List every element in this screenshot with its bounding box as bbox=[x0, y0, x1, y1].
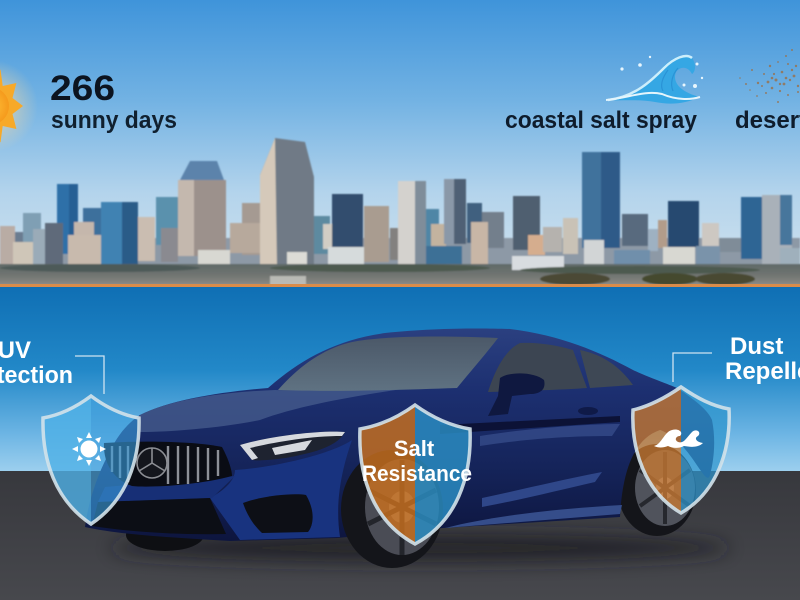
door handle bbox=[578, 407, 598, 415]
front wheel bbox=[341, 450, 443, 568]
label: coastal salt spray: coastal salt spray bbox=[505, 107, 698, 134]
label: Salt Resistance bbox=[362, 436, 472, 486]
rear wheel bbox=[618, 444, 696, 536]
car shadow bbox=[110, 534, 730, 562]
sill highlight bbox=[445, 505, 622, 528]
blue lower panel bbox=[0, 287, 800, 471]
label: Dust Repellent bbox=[725, 333, 800, 385]
label: UV Protection bbox=[0, 337, 73, 389]
headlight bbox=[240, 432, 345, 460]
skyline bbox=[0, 138, 800, 285]
icon: sun in shield bbox=[72, 432, 106, 466]
icon: ocean wave bbox=[605, 55, 703, 104]
front fender bbox=[210, 440, 352, 540]
mirror bbox=[488, 373, 544, 416]
stat: sunny days: sunny days bbox=[51, 107, 177, 134]
icon: desert dust particles bbox=[739, 49, 799, 103]
windshield bbox=[278, 337, 498, 391]
front grille bbox=[104, 442, 232, 487]
orange divider band bbox=[0, 284, 800, 287]
icon: sun bbox=[0, 60, 38, 152]
front side window bbox=[488, 343, 587, 392]
callout line: UV bbox=[75, 356, 104, 394]
side lower highlight bbox=[482, 472, 602, 507]
label: Salt Resistance: Salt bbox=[394, 436, 435, 461]
headlight detail bbox=[240, 432, 345, 460]
callout line: Dust bbox=[673, 353, 712, 382]
shield: salt resistance bbox=[360, 405, 472, 544]
sky background bbox=[0, 0, 800, 285]
stat: sunny days bbox=[50, 69, 177, 134]
shield: dust repellent bbox=[633, 387, 729, 513]
shield: UV protection bbox=[43, 396, 139, 524]
ground bbox=[0, 471, 800, 600]
icon: waves in shield bbox=[654, 429, 703, 448]
hood highlight bbox=[140, 388, 410, 432]
label: Salt Resistance: Resistance bbox=[362, 461, 472, 486]
front tyre left bbox=[126, 519, 204, 551]
emblem bbox=[137, 448, 167, 478]
door shadow bbox=[440, 416, 620, 434]
lower nose bbox=[98, 476, 235, 502]
lower air intakes bbox=[92, 494, 313, 534]
car body bbox=[85, 328, 714, 541]
rear side window bbox=[580, 350, 633, 388]
car bbox=[85, 328, 730, 568]
stat: sunny days: 266 bbox=[50, 69, 115, 108]
label: Dust Repellent: Dust bbox=[730, 333, 783, 360]
door stripe bbox=[480, 424, 620, 446]
